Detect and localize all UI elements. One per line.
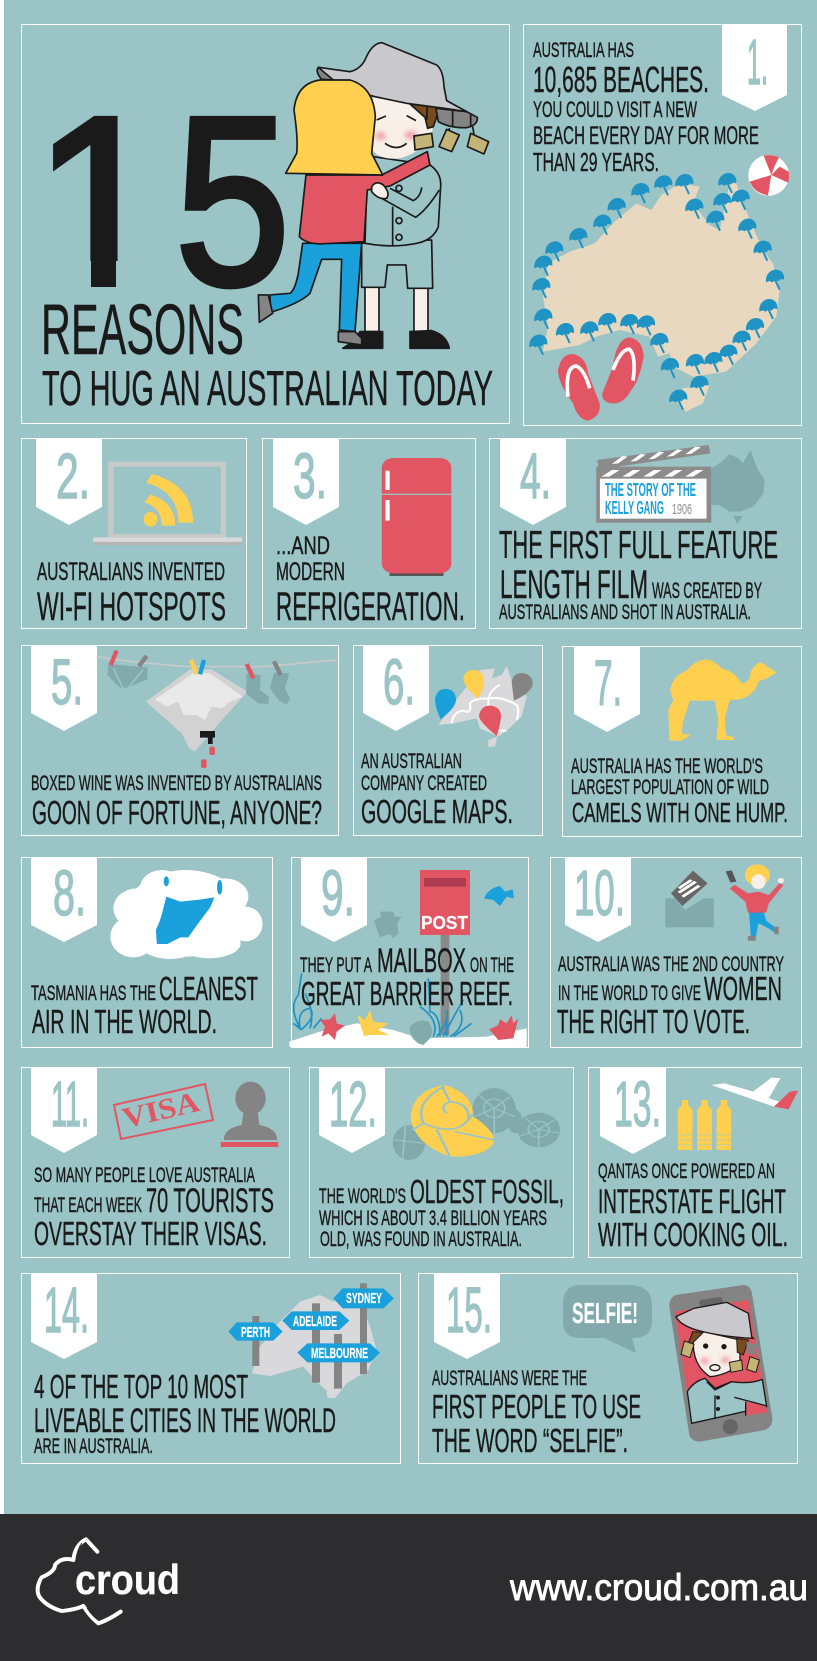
text: mailbox: ON THE [470, 954, 514, 977]
website url: www.croud.com.au [509, 1567, 808, 1608]
panel: reason 11 visas [22, 1067, 290, 1258]
text: boxed wine [31, 772, 322, 831]
text: mailbox [300, 942, 514, 1012]
title number 15: 5 [175, 67, 290, 335]
icon: signposts on map: SYDNEY [346, 1290, 382, 1307]
text: liveable cities [34, 1368, 336, 1458]
panel: reason 1 beaches [524, 24, 802, 426]
number badge 15: 15. [446, 1274, 492, 1346]
text: beaches: YOU COULD VISIT A NEW [533, 97, 697, 122]
number badge 11 [31, 1067, 97, 1153]
footer bar [0, 1514, 817, 1661]
text: refrigeration: MODERN [276, 558, 345, 586]
text: boxed wine: GOON OF FORTUNE, ANYONE? [32, 794, 322, 831]
icon: signposts on map: PERTH [241, 1324, 270, 1341]
title: reasons: REASONS [41, 291, 244, 370]
text: first feature film: LENGTH FILM [500, 563, 648, 607]
number badge 10: 10. [574, 857, 625, 929]
icon: fridge [382, 458, 451, 576]
logo: croud [38, 1539, 180, 1623]
icon: visa stamp [114, 1082, 278, 1147]
icon: clapperboard [596, 445, 711, 523]
text: camels [571, 755, 788, 828]
number badge 10 [565, 857, 631, 942]
text: fossil: THE WORLD'S [319, 1185, 406, 1208]
icon: map with pins [435, 666, 533, 747]
panel: reason 3 refrigeration [262, 438, 476, 629]
text: refrigeration: REFRIGERATION. [276, 585, 465, 629]
text: wi-fi hotspots: WI-FI HOTSPOTS [37, 585, 226, 629]
number badge 3: 3. [293, 440, 327, 512]
text: beaches: THAN 29 YEARS. [533, 147, 659, 177]
subtitle: TO HUG AN AUSTRALIAN TODAY [42, 362, 493, 416]
number badge 2 [36, 438, 102, 525]
icon: selfie speech bubble: SELFIE! [572, 1298, 638, 1330]
panel: reason 4 first feature film [490, 438, 802, 628]
text: selfie [432, 1367, 641, 1459]
text: refrigeration: ...AND [276, 532, 330, 560]
number badge 7 [574, 646, 640, 732]
text: google maps: AN AUSTRALIAN [361, 750, 462, 773]
number badge 15 [434, 1273, 500, 1359]
text: tasmania: TASMANIA HAS THE [31, 982, 156, 1005]
number badge 3 [273, 438, 339, 525]
number badge 7: 7. [594, 647, 622, 719]
icon: clothesline with goon bag [97, 651, 337, 768]
icon: clapperboard: KELLY GANG [605, 498, 664, 518]
text: refrigeration [276, 532, 465, 629]
icon: clapperboard: THE STORY OF THE [605, 480, 696, 500]
number badge 4: 4. [520, 440, 551, 512]
panel: reason 13 cooking oil [588, 1067, 802, 1258]
text: fossil: WHICH IS ABOUT 3.4 BILLION YEARS [319, 1207, 547, 1230]
panel: hero title [22, 24, 510, 424]
icon: signposts on map: MELBOURNE [311, 1345, 368, 1362]
text: fossil [319, 1173, 564, 1251]
text: visas: SO MANY PEOPLE LOVE AUSTRALIA [34, 1164, 255, 1187]
icon: signposts on map [228, 1283, 394, 1398]
text: wi-fi hotspots [37, 558, 226, 629]
text: liveable cities: 4 OF THE TOP 10 MOST [34, 1368, 248, 1405]
number badge 11: 11. [51, 1068, 89, 1140]
icon: phone with selfie [669, 1285, 772, 1442]
icon: clapperboard: 1906 [672, 501, 692, 518]
panel: reason 2 wi-fi [22, 438, 246, 629]
text: selfie: AUSTRALIANS WERE THE [432, 1367, 587, 1390]
panel: reason 10 women vote [550, 857, 802, 1048]
text: liveable cities: ARE IN AUSTRALIA. [34, 1435, 153, 1458]
text: visas: 70 TOURISTS [146, 1182, 274, 1220]
panel: reason 14 liveable cities [22, 1273, 400, 1464]
text: visas [34, 1164, 274, 1252]
text: women vote: IN THE WORLD TO GIVE [558, 982, 701, 1005]
number badge 5 [31, 645, 97, 731]
text: tasmania [31, 970, 258, 1040]
number badge 6 [363, 645, 429, 731]
text: google maps: GOOGLE MAPS. [361, 793, 513, 830]
number badge 8 [31, 857, 97, 942]
text: visas: THAT EACH WEEK [34, 1194, 142, 1217]
text: women vote [557, 953, 784, 1040]
logo: croud: croud [75, 1556, 180, 1603]
number badge 13: 13. [614, 1068, 661, 1140]
text: boxed wine: BOXED WINE WAS INVENTED BY AUSTRALIANS [31, 772, 322, 795]
panel: reason 8 tasmania [22, 857, 272, 1048]
text: beaches [533, 39, 759, 177]
number badge 6: 6. [383, 646, 415, 718]
text: mailbox: THEY PUT A [300, 954, 372, 977]
text: mailbox: GREAT BARRIER REEF. [301, 975, 513, 1012]
title number 15: 1 [33, 67, 166, 335]
icon: fossil shells [393, 1085, 560, 1160]
text: google maps: COMPANY CREATED [361, 772, 487, 795]
icon: reef mailbox: POST [421, 913, 468, 933]
icon: selfie speech bubble [563, 1285, 652, 1353]
icon: signposts on map: ADELAIDE [293, 1313, 337, 1330]
text: beaches: AUSTRALIA HAS [533, 39, 634, 62]
panel: reason 5 boxed wine [22, 645, 338, 836]
icon: laptop with wifi [93, 462, 242, 545]
text: selfie: FIRST PEOPLE TO USE [432, 1388, 641, 1425]
text: visas: OVERSTAY THEIR VISAS. [34, 1215, 267, 1252]
text: mailbox: MAILBOX [377, 942, 466, 980]
number badge 1 [722, 24, 787, 111]
number badge 9 [301, 857, 367, 942]
number badge 4 [500, 438, 566, 525]
icon: couple hugging [258, 43, 489, 348]
number badge 13 [600, 1067, 666, 1154]
number badge 12: 12. [329, 1068, 377, 1140]
text: first feature film [499, 524, 778, 624]
text: tasmania: AIR IN THE WORLD. [32, 1003, 217, 1040]
text: fossil: OLD, WAS FOUND IN AUSTRALIA. [320, 1228, 522, 1251]
icon: ballot box and woman [665, 864, 784, 941]
text: google maps [361, 750, 513, 830]
text: fossil: OLDEST FOSSIL, [410, 1173, 564, 1210]
panel: reason 6 google maps [354, 645, 542, 836]
icon: oil bottles and plane [678, 1078, 798, 1150]
text: selfie: THE WORD “SELFIE”. [432, 1422, 628, 1459]
text: cooking oil [598, 1160, 788, 1253]
panel: reason 9 mailbox [289, 857, 528, 1048]
icon: map with umbrellas, ball and thongs [529, 155, 789, 421]
icon: map behind clapperboard [711, 450, 765, 524]
title number 15 [33, 67, 290, 335]
number badge 8: 8. [53, 857, 86, 929]
number badge 14: 14. [44, 1274, 89, 1346]
panel: reason 12 fossil [310, 1067, 574, 1258]
number badge 2: 2. [56, 440, 90, 512]
text: tasmania: CLEANEST [159, 970, 258, 1007]
text: wi-fi hotspots: AUSTRALIANS INVENTED [37, 558, 225, 586]
icon: reef mailbox [289, 870, 527, 1047]
icon: cloud with tasmania [110, 870, 263, 959]
panel: reason 7 camels [562, 646, 802, 836]
number badge 14 [31, 1273, 97, 1359]
number badge 9: 9. [321, 857, 355, 929]
number badge 5: 5. [51, 646, 83, 718]
icon: visa stamp: VISA [119, 1086, 203, 1135]
number badge 12 [319, 1067, 385, 1153]
text: liveable cities: LIVEABLE CITIES IN THE WORLD [34, 1402, 336, 1440]
panel: reason 15 selfie [418, 1273, 798, 1464]
number badge 1: 1. [747, 26, 768, 98]
icon: camel [668, 659, 777, 741]
